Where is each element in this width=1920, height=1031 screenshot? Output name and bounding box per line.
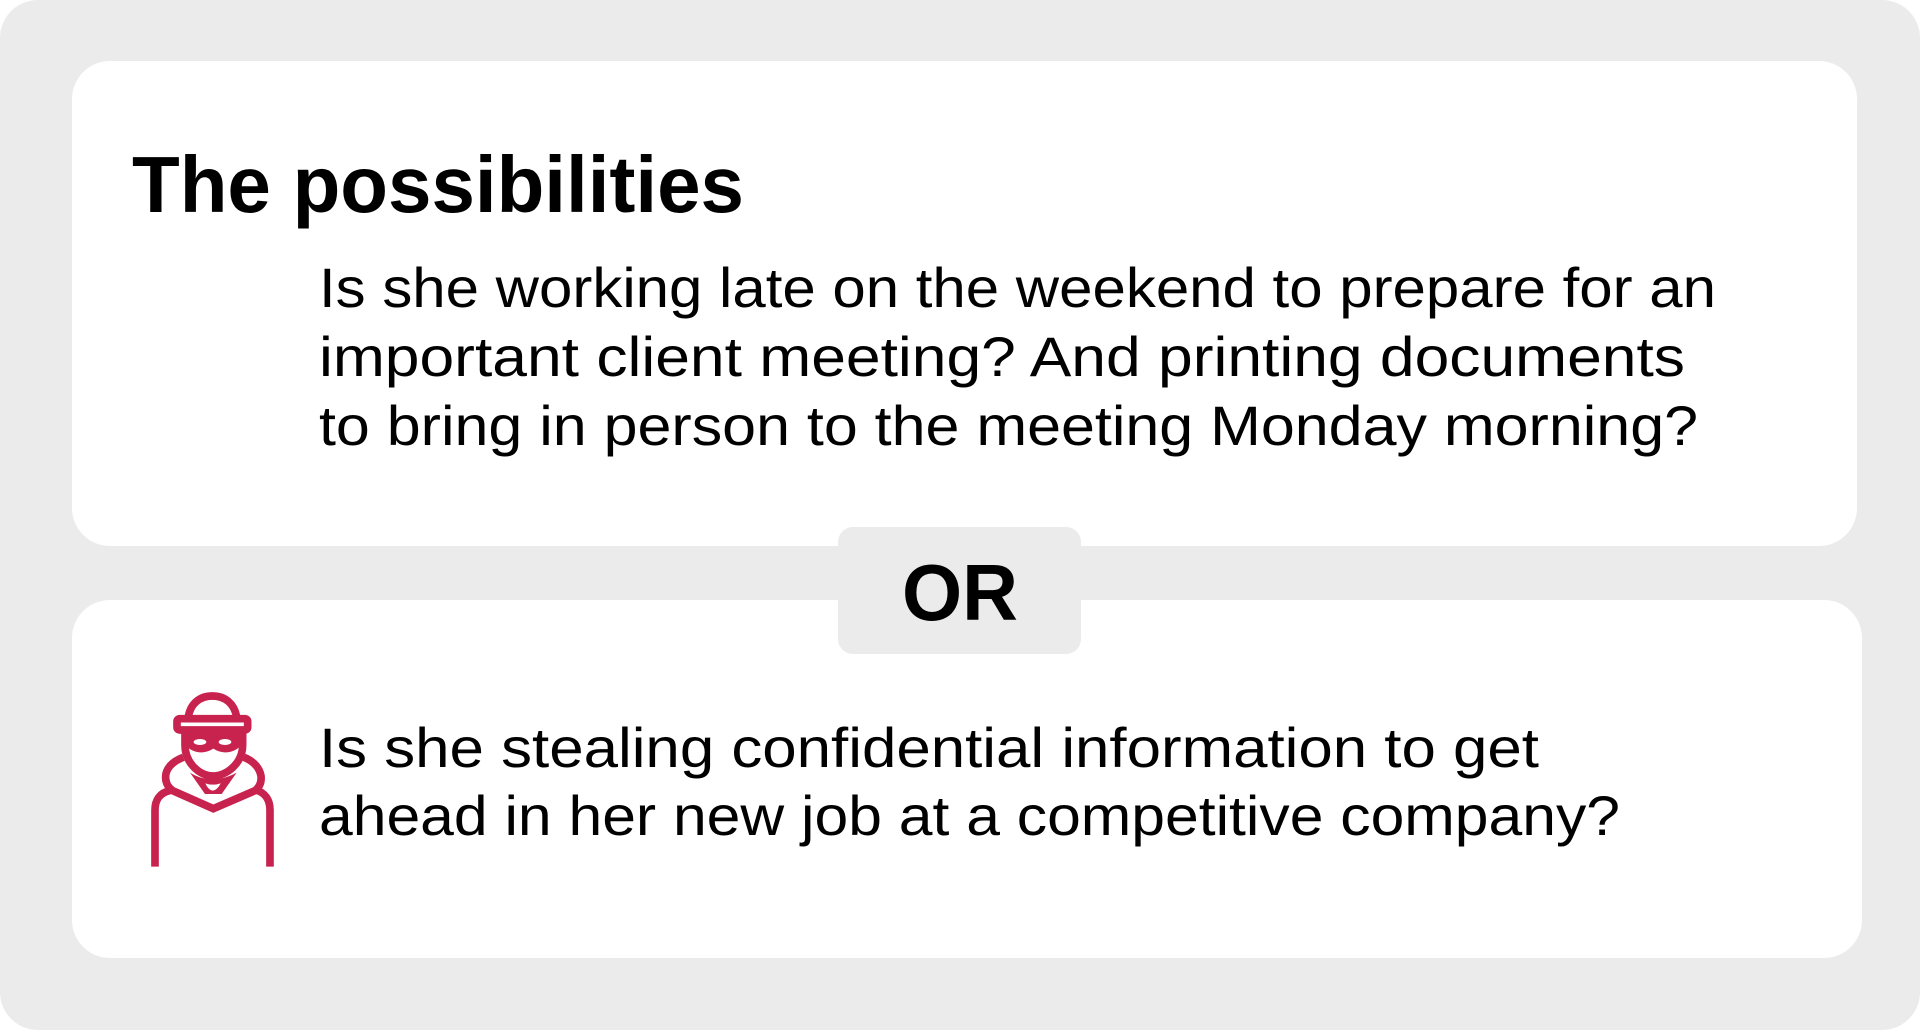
- icon: masked thief: [155, 696, 270, 867]
- text block: stealing information: ahead in her new job at a competitive company?: [319, 784, 1620, 847]
- text block: working late: [319, 256, 1716, 457]
- text block: working late: Is she working late on the weekend to prepare for an: [319, 256, 1716, 319]
- OR badge: [838, 527, 1081, 654]
- OR badge: OR: [902, 548, 1018, 637]
- heading: The possibilities: The possibilities: [132, 140, 744, 229]
- text block: stealing information: [319, 716, 1620, 847]
- text block: stealing information: Is she stealing confidential information to get: [319, 716, 1539, 779]
- panel: first possibility: [72, 61, 1857, 546]
- panel: second possibility: [72, 600, 1862, 958]
- text block: working late: to bring in person to the meeting Monday morning?: [319, 394, 1698, 457]
- text block: working late: important client meeting? And printing documents: [319, 325, 1685, 388]
